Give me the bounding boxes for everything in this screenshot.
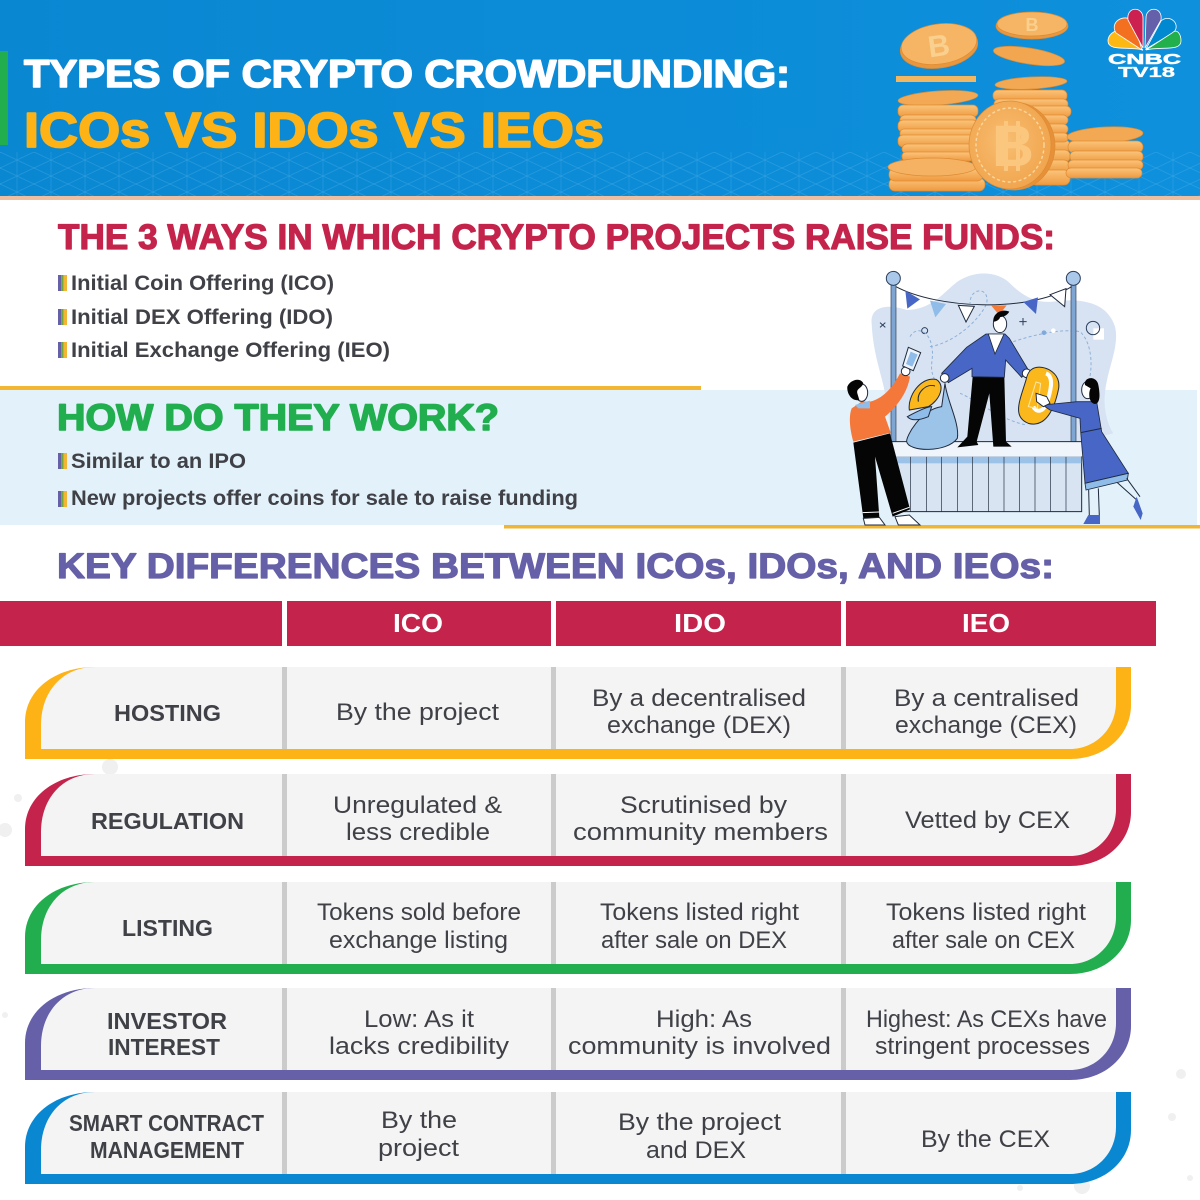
- list item: IEO: Initial Exchange Offering (IEO): [71, 339, 390, 362]
- cell: IDO listing: Tokens listed right: [600, 899, 799, 926]
- icon: bitcoin coin stacks: B: [1026, 15, 1038, 35]
- list item: IDO: Initial DEX Offering (IDO): [71, 306, 333, 329]
- cell: IDO regulation: community members: [573, 819, 828, 846]
- cell: ICO hosting: By the project: [336, 699, 499, 726]
- list item: new projects: New projects offer coins for sale to raise funding: [71, 487, 578, 510]
- row: regulation: [25, 774, 1131, 866]
- cell: IEO listing: Tokens listed right: [886, 899, 1086, 926]
- heading: the 3 ways: THE 3 WAYS IN WHICH CRYPTO PROJECTS RAISE FUNDS:: [58, 218, 1055, 257]
- panel: how do they work: [0, 386, 1200, 528]
- cell: IDO investor interest: [568, 1006, 831, 1060]
- cell: IEO investor interest: stringent processes: [875, 1033, 1090, 1060]
- cell: IDO smart contract: and DEX: [646, 1137, 746, 1164]
- cell: ICO investor interest: Low: As it: [364, 1006, 474, 1033]
- column header: ICO: [287, 601, 551, 646]
- title: [24, 53, 790, 158]
- cell: ICO investor interest: lacks credibility: [329, 1033, 510, 1060]
- header banner: [0, 0, 1200, 200]
- row: smart contract management: [25, 1092, 1131, 1184]
- icon: CNBC TV18 logo: TV18: [1118, 65, 1175, 81]
- row: investor interest: [25, 988, 1131, 1080]
- row label: HOSTING: [114, 700, 221, 726]
- cell: IEO hosting: By a centralised: [894, 685, 1079, 712]
- cell: ICO listing: [317, 899, 521, 954]
- cell: IEO smart contract: By the CEX: [921, 1126, 1050, 1153]
- cell: IDO hosting: [592, 685, 806, 739]
- cell: IDO hosting: By a decentralised: [592, 685, 806, 712]
- cell: IDO investor interest: community is involved: [568, 1033, 831, 1060]
- list item: similar to an IPO: Similar to an IPO: [71, 450, 246, 473]
- cell: IEO listing: after sale on CEX: [892, 927, 1075, 954]
- column header: IEO: IEO: [962, 608, 1010, 638]
- list: three funding types: [58, 272, 390, 362]
- row: hosting: [25, 667, 1131, 759]
- cell: ICO smart contract: [378, 1107, 459, 1162]
- row: listing: [25, 882, 1131, 974]
- cell: ICO regulation: [333, 792, 502, 846]
- column header: IDO: [556, 601, 841, 646]
- icon: CNBC TV18 logo: CNBC: [1108, 51, 1181, 68]
- cell: IEO regulation: Vetted by CEX: [905, 807, 1070, 834]
- cell: IDO listing: after sale on DEX: [601, 927, 787, 954]
- cell: IEO hosting: exchange (CEX): [895, 712, 1077, 739]
- cell: ICO investor interest: [329, 1006, 510, 1060]
- icon: bitcoin coin stacks: [888, 12, 1143, 191]
- cell: IEO hosting: [894, 685, 1079, 739]
- column header: IDO: IDO: [674, 608, 726, 638]
- cell: IDO regulation: Scrutinised by: [620, 792, 788, 819]
- cell: ICO regulation: less credible: [346, 819, 490, 846]
- title: TYPES OF CRYPTO CROWDFUNDING:: [24, 53, 790, 96]
- icon: CNBC TV18 logo: [1108, 9, 1181, 81]
- cell: ICO regulation: Unregulated &: [333, 792, 502, 819]
- list item: ICO: Initial Coin Offering (ICO): [71, 272, 334, 295]
- cell: IEO investor interest: [866, 1006, 1107, 1060]
- green accent bar: [0, 51, 8, 145]
- row label: REGULATION: [91, 808, 244, 834]
- heading: how do they work: HOW DO THEY WORK?: [57, 397, 499, 438]
- row label: SMART CONTRACT: [69, 1110, 264, 1136]
- cell: IDO hosting: exchange (DEX): [607, 712, 791, 739]
- background: faint dots behind table: [0, 759, 1193, 1194]
- icon: bitcoin coin stacks: B: [926, 29, 952, 64]
- heading: key differences: KEY DIFFERENCES BETWEEN ICOs, IDOs, AND IEOs:: [57, 547, 1054, 586]
- cell: IDO regulation: [573, 792, 828, 846]
- icon: bitcoin coin stacks: B: [992, 114, 1034, 179]
- cell: ICO listing: Tokens sold before: [317, 899, 521, 926]
- row label: LISTING: [122, 915, 213, 941]
- cell: ICO smart contract: project: [378, 1135, 459, 1162]
- cell: IDO smart contract: [618, 1109, 781, 1164]
- row label: [69, 1110, 264, 1163]
- row label: INTEREST: [108, 1034, 220, 1060]
- table header row: [0, 601, 1156, 646]
- illustration: token sale stage: [847, 271, 1143, 525]
- column header: ICO: ICO: [393, 608, 443, 638]
- cell: ICO smart contract: By the: [381, 1107, 457, 1134]
- cell: IDO listing: [600, 899, 799, 954]
- cell: IEO listing: [886, 899, 1086, 954]
- row label: [107, 1008, 227, 1060]
- title: ICOs VS IDOs VS IEOs: [24, 104, 604, 158]
- cell: IDO investor interest: High: As: [656, 1006, 752, 1033]
- cell: ICO listing: exchange listing: [329, 927, 508, 954]
- column header: IEO: [846, 601, 1156, 646]
- row label: INVESTOR: [107, 1008, 227, 1034]
- row label: MANAGEMENT: [90, 1137, 244, 1163]
- cell: IDO smart contract: By the project: [618, 1109, 781, 1136]
- cell: IEO investor interest: Highest: As CEXs have: [866, 1006, 1107, 1033]
